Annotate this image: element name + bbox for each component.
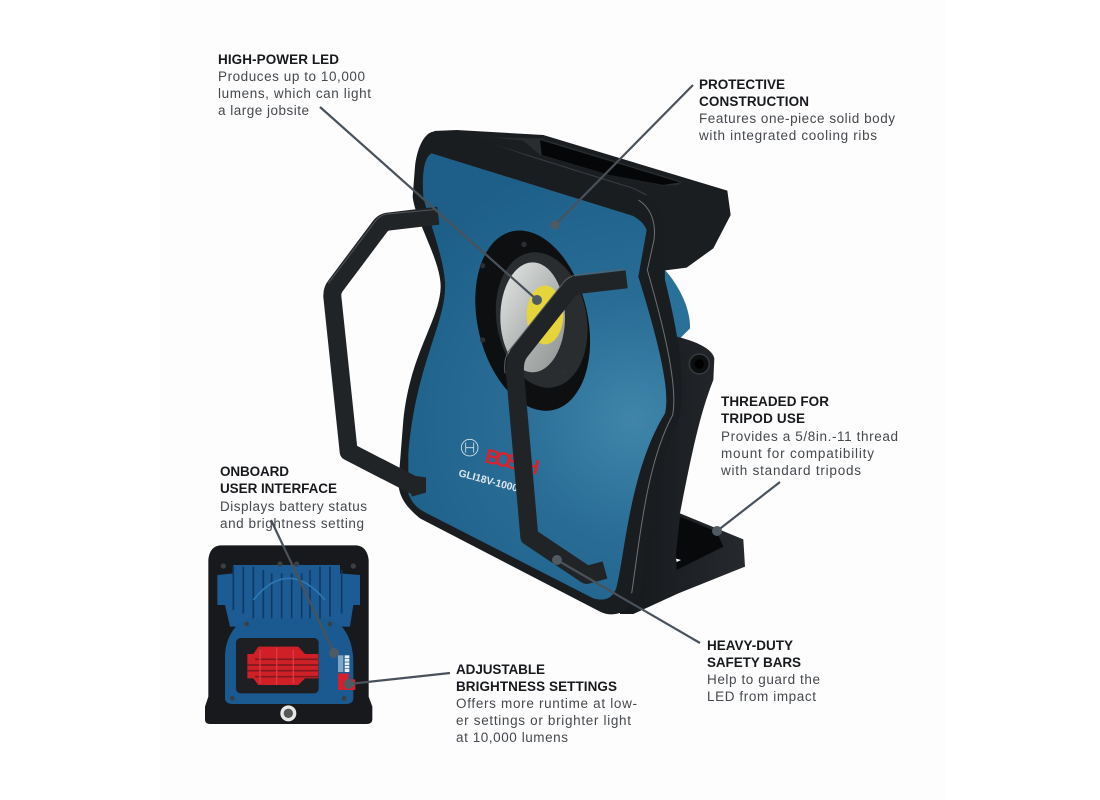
Bosch logo and model: BOSCH bbox=[483, 445, 542, 480]
callout: heavy-duty safety bars bbox=[707, 638, 820, 704]
callout: adjustable brightness settings: BRIGHTNESS SETTINGS bbox=[456, 679, 617, 694]
blue front panel bbox=[408, 153, 666, 600]
line: threaded for tripod bbox=[712, 482, 780, 536]
front rim bbox=[398, 132, 682, 614]
callout: onboard user interface: ONBOARD bbox=[220, 464, 289, 479]
callout: onboard user interface: USER INTERFACE bbox=[220, 481, 337, 496]
line: protective construction bbox=[550, 85, 693, 230]
battery bbox=[236, 638, 319, 693]
line: brightness settings bbox=[344, 673, 450, 689]
red brightness button bbox=[338, 673, 355, 690]
callout: high-power LED: HIGH-POWER LED bbox=[218, 52, 339, 67]
rim highlight bbox=[632, 200, 674, 593]
left safety bar bbox=[328, 209, 438, 497]
callout: adjustable brightness settings: er settings or brighter light bbox=[456, 713, 631, 728]
tripod socket bbox=[280, 705, 296, 721]
callout: heavy-duty safety bars: LED from impact bbox=[707, 689, 816, 704]
lower blue panel bbox=[225, 618, 353, 704]
front safety bar bbox=[505, 269, 627, 575]
callout lines bbox=[271, 85, 780, 689]
screws bbox=[221, 561, 356, 701]
callout: high-power LED: Produces up to 10,000 bbox=[218, 69, 365, 84]
callout: threaded for tripod use: Provides a 5/8in.-11 thread bbox=[721, 429, 898, 444]
lens housing bbox=[458, 219, 607, 422]
cooling ribs bbox=[217, 565, 360, 627]
callout: adjustable brightness settings bbox=[456, 662, 637, 745]
callout: threaded for tripod use: with standard tripods bbox=[720, 463, 861, 478]
callout: protective construction: Features one-piece solid body bbox=[699, 111, 895, 126]
callout: heavy-duty safety bars: SAFETY BARS bbox=[707, 655, 801, 670]
indicator panel bbox=[338, 655, 349, 672]
callout: heavy-duty safety bars: Help to guard the bbox=[707, 672, 820, 687]
hinge and tripod base bbox=[620, 337, 745, 614]
line: safety bars bbox=[552, 555, 700, 643]
rear blue disc bbox=[662, 268, 690, 343]
callout: high-power LED: a large jobsite bbox=[218, 103, 309, 118]
callout: protective construction: PROTECTIVE bbox=[699, 77, 785, 92]
callout: heavy-duty safety bars: HEAVY-DUTY bbox=[707, 638, 793, 653]
callout: protective construction: with integrated cooling ribs bbox=[698, 128, 877, 143]
callout: threaded for tripod use: TRIPOD USE bbox=[721, 411, 805, 426]
callout: onboard user interface: and brightness setting bbox=[220, 516, 364, 531]
callout: protective construction: CONSTRUCTION bbox=[699, 94, 809, 109]
Bosch logo and model: GLI18V-10000 bbox=[457, 468, 525, 496]
callout: threaded for tripod use: mount for compatibility bbox=[721, 446, 874, 461]
callout: onboard user interface bbox=[220, 464, 367, 531]
callout: adjustable brightness settings: ADJUSTABLE bbox=[456, 662, 545, 677]
callout: onboard user interface: Displays battery status bbox=[220, 499, 367, 514]
main product: work light bbox=[328, 130, 745, 614]
callout: adjustable brightness settings: at 10,000 lumens bbox=[456, 730, 568, 745]
callout: threaded for tripod use bbox=[720, 394, 898, 478]
line: user interface bbox=[271, 520, 339, 658]
callout: high-power LED bbox=[218, 52, 371, 118]
rear housing bbox=[205, 545, 372, 724]
callout: threaded for tripod use: THREADED FOR bbox=[721, 394, 829, 409]
Bosch logo and model bbox=[457, 439, 542, 496]
top carry handle bbox=[433, 130, 731, 271]
callout: high-power LED: lumens, which can light bbox=[218, 86, 371, 101]
callout: adjustable brightness settings: Offers more runtime at low- bbox=[456, 696, 637, 711]
rear view: onboard controls bbox=[205, 545, 372, 724]
line: high-power LED bbox=[320, 107, 542, 305]
callout: protective construction bbox=[698, 77, 895, 143]
